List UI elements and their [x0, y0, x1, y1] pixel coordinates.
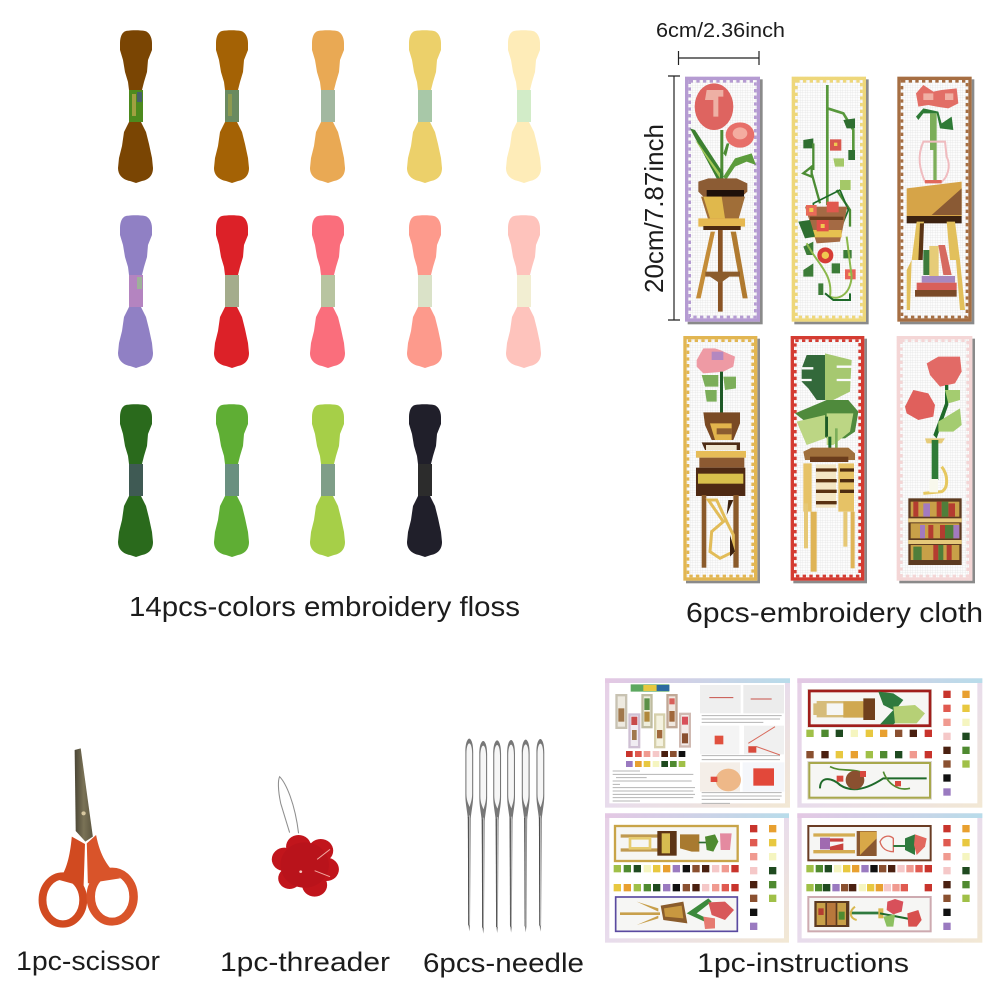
sheet 2: monstera and vine charts: [797, 678, 982, 808]
panel: embroidery cloth top row: [685, 77, 974, 324]
threader caption: 1pc-threader: [220, 947, 390, 977]
panel: embroidery floss: [118, 30, 541, 557]
width dimension bar: [678, 51, 759, 65]
floss: dark brown: [118, 30, 153, 183]
icon: needle threader: [272, 777, 339, 897]
panel: tools: [42, 739, 544, 934]
bookmark: monstera on stand: [791, 336, 867, 583]
bookmark: tulip on stool: [685, 77, 763, 324]
floss: lavender: [118, 215, 153, 368]
sheet 3: stand and tulip charts: [605, 813, 789, 943]
floss: brown: [214, 30, 249, 183]
floss: yellow: [407, 30, 442, 183]
floss: light pink: [506, 215, 541, 368]
floss: green: [214, 404, 249, 557]
bookmark: rose in vase on bookshelf: [897, 336, 975, 583]
floss: black: [407, 404, 442, 557]
bookmark: pink flower vase on table: [897, 77, 974, 324]
floss: red: [214, 215, 249, 368]
floss: dark green: [118, 404, 153, 557]
floss: salmon: [407, 215, 442, 368]
floss: cream: [506, 30, 541, 183]
height dimension bar: [668, 76, 680, 320]
panel: instruction sheets: [605, 678, 982, 943]
sheet 4: vase and rose charts: [797, 813, 982, 943]
bookmark: hanging basket: [792, 77, 869, 324]
floss: orange: [310, 30, 345, 183]
scissor caption: 1pc-scissor: [16, 946, 160, 976]
sheet 1: overview: [605, 678, 790, 808]
floss caption: 14pcs-colors embroidery floss: [129, 591, 520, 622]
icon: six needles: [465, 739, 544, 934]
instructions caption: 1pc-instructions: [697, 948, 909, 978]
needle caption: 6pcs-needle: [423, 948, 584, 978]
width dimension label: 6cm/2.36inch: [656, 20, 785, 42]
height dimension label: 20cm/7.87inch: [639, 124, 669, 293]
icon: scissors: [42, 748, 134, 924]
floss: pink: [310, 215, 345, 368]
panel: embroidery cloth bottom row: [683, 336, 975, 583]
floss: lime: [310, 404, 345, 557]
bookmark: pink flower on plant stand: [683, 336, 760, 583]
cloth caption: 6pcs-embroidery cloth: [686, 597, 983, 628]
